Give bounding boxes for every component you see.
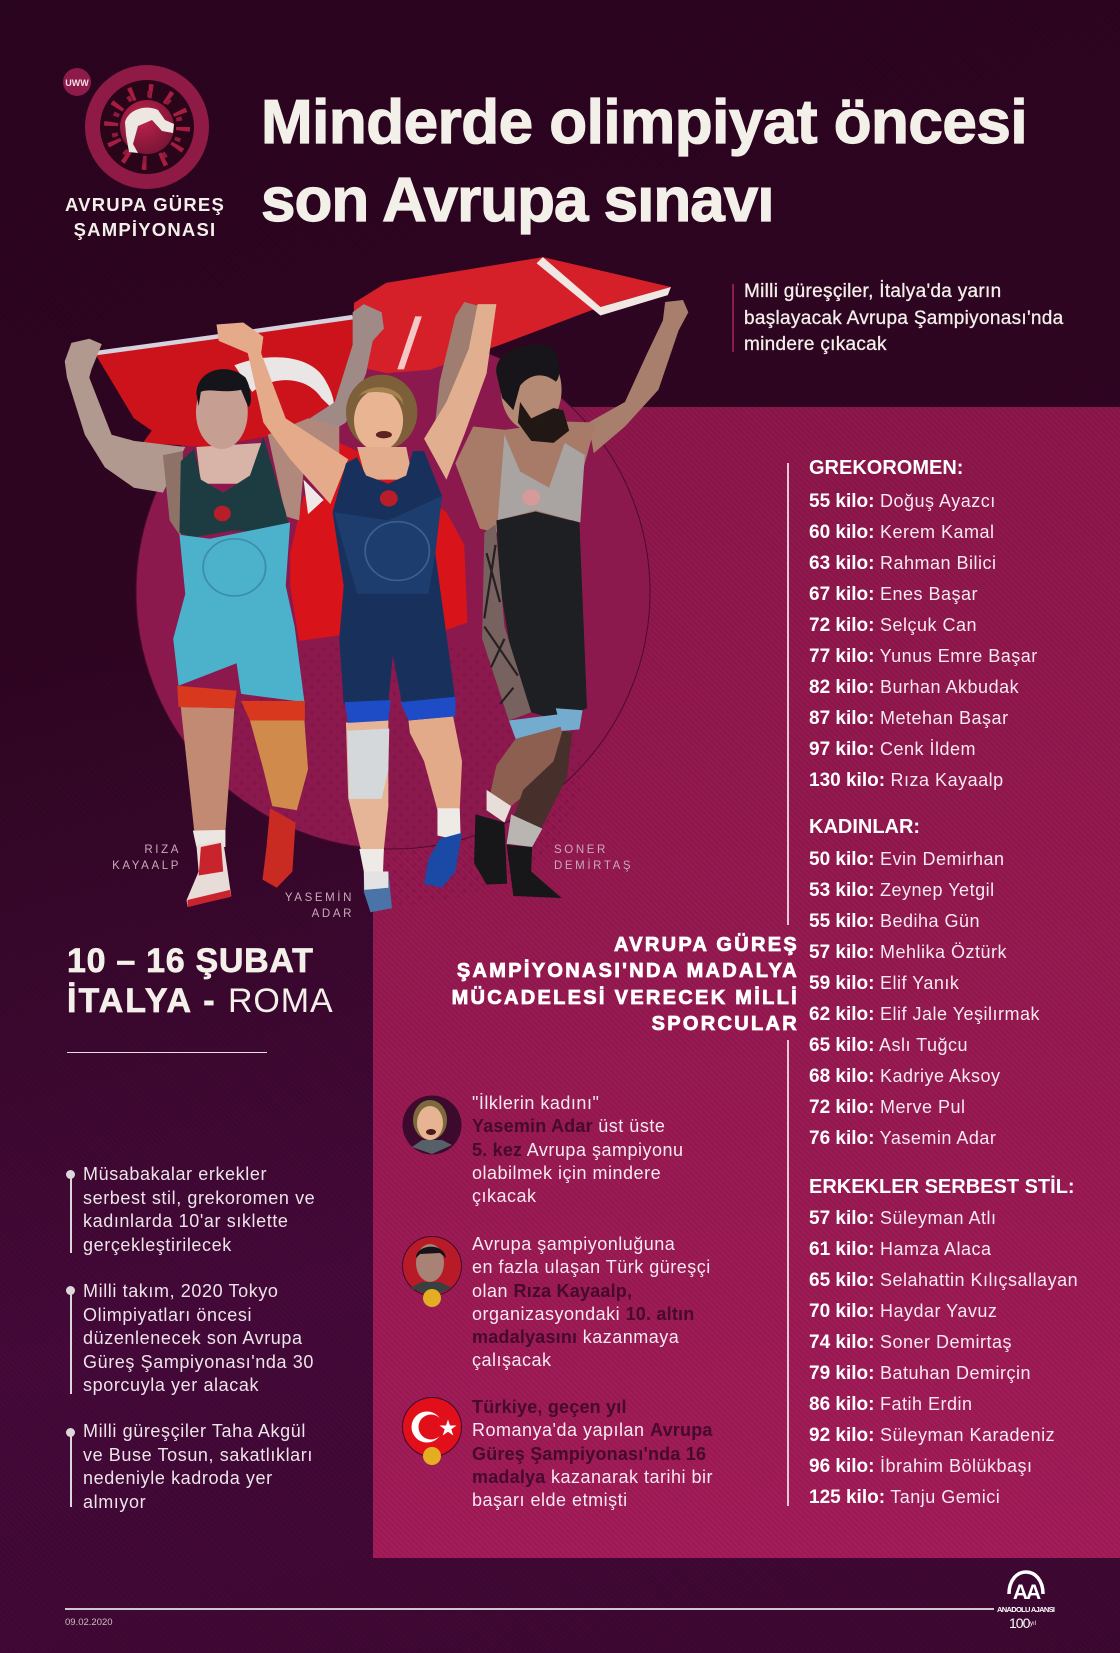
list: Kadınlar: 53 kilo: Zeynep Yetgil xyxy=(809,880,995,901)
list divider xyxy=(787,463,788,925)
label: Yasemin Adar xyxy=(285,890,354,920)
text: Rıza Kayaalp xyxy=(472,1234,711,1370)
list: Grekoromen: 67 kilo: Enes Başar xyxy=(809,584,978,605)
heading: Erkekler Serbest Stil: ERKEKLER SERBEST STİL: xyxy=(809,1176,1075,1198)
list: Grekoromen: 60 kilo: Kerem Kamal xyxy=(809,522,995,543)
caption: Avrupa Güreş Şampiyonası: ŞAMPİYONASI xyxy=(74,219,216,240)
list: Grekoromen: 97 kilo: Cenk İldem xyxy=(809,739,976,760)
label: Yasemin Adar: YASEMİN xyxy=(285,892,354,904)
list: Kadınlar: 68 kilo: Kadriye Aksoy xyxy=(809,1066,1001,1087)
date and location heading: İTALYA - ROMA xyxy=(67,982,334,1020)
list: Erkekler Serbest Stil: 61 kilo: Hamza Alaca xyxy=(809,1239,992,1260)
text: Türkiye 16 medals xyxy=(472,1397,713,1510)
bullet: competition format: gerçekleştirilecek xyxy=(83,1234,232,1254)
bullet: national team: düzenlenecek son Avrupa xyxy=(83,1328,303,1348)
text: Yasemin Adar xyxy=(472,1093,684,1206)
list: Erkekler Serbest Stil: 92 kilo: Süleyman Karadeniz xyxy=(809,1425,1055,1446)
wrestler: Rıza Kayaalp xyxy=(65,304,384,907)
label: Soner Demirtaş: DEMİRTAŞ xyxy=(554,860,633,872)
caption: Avrupa Güreş Şampiyonası xyxy=(65,194,225,240)
wrestler: Yasemin Adar xyxy=(217,304,496,912)
bullet: injured wrestlers: nedeniyle kadroda yer xyxy=(83,1468,273,1488)
list: Kadınlar: 76 kilo: Yasemin Adar xyxy=(809,1128,996,1149)
list: Kadınlar: 57 kilo: Mehlika Öztürk xyxy=(809,942,1007,963)
text: Rıza Kayaalp: organizasyondaki 10. altın xyxy=(472,1304,694,1324)
text: Rıza Kayaalp: olan Rıza Kayaalp, xyxy=(472,1281,632,1301)
heading: athletes competing for medals: SPORCULAR xyxy=(652,1013,799,1035)
text: Rıza Kayaalp: en fazla ulaşan Türk güreşçi xyxy=(472,1257,711,1277)
list: Erkekler Serbest Stil: 70 kilo: Haydar Yavuz xyxy=(809,1301,997,1322)
logo: Anadolu Ajansı: AA xyxy=(1013,1581,1041,1604)
heading: Grekoromen: GREKOROMEN: xyxy=(809,457,963,479)
label: Soner Demirtaş: SONER xyxy=(554,844,608,856)
list: Kadınlar: 59 kilo: Elif Yanık xyxy=(809,973,959,994)
list: Erkekler Serbest Stil xyxy=(809,1208,1078,1508)
list: Grekoromen: 87 kilo: Metehan Başar xyxy=(809,708,1009,729)
list: Erkekler Serbest Stil: 125 kilo: Tanju Gemici xyxy=(809,1487,1000,1508)
title xyxy=(261,88,1027,235)
UWW badge: UWW xyxy=(65,78,89,88)
label: Rıza Kayaalp xyxy=(112,844,181,872)
label: Rıza Kayaalp: KAYAALP xyxy=(112,860,181,872)
intro text with side bar: mindere çıkacak xyxy=(744,334,887,355)
text: Rıza Kayaalp: çalışacak xyxy=(472,1350,552,1370)
text: Türkiye 16 medals: Güreş Şampiyonası'nda 16 xyxy=(472,1444,706,1464)
label: Soner Demirtaş xyxy=(554,844,633,872)
list: Kadınlar: 55 kilo: Bediha Gün xyxy=(809,911,980,932)
text: Türkiye 16 medals: Türkiye, geçen yıl xyxy=(472,1397,627,1417)
text: Türkiye 16 medals: Romanya'da yapılan Avrupa xyxy=(472,1420,713,1440)
heading: Kadınlar: KADINLAR: xyxy=(809,816,920,838)
text: Yasemin Adar: Yasemin Adar üst üste xyxy=(472,1116,665,1136)
list: Kadınlar xyxy=(809,849,1040,1149)
list: Erkekler Serbest Stil: 79 kilo: Batuhan Demirçin xyxy=(809,1363,1031,1384)
title: son Avrupa sınavı xyxy=(261,166,773,234)
list: Erkekler Serbest Stil: 96 kilo: İbrahim Bölükbaşı xyxy=(809,1456,1033,1477)
heading: athletes competing for medals: MÜCADELESİ VERECEK MİLLİ xyxy=(452,987,799,1009)
emblem ring xyxy=(85,65,209,189)
list divider lower xyxy=(787,1040,788,1506)
bullet: national team: Güreş Şampiyonası'nda 30 xyxy=(83,1352,314,1372)
label: Yasemin Adar: ADAR xyxy=(312,908,354,920)
icon: Rıza Kayaalp portrait with medal xyxy=(402,1236,462,1307)
list: Kadınlar: 65 kilo: Aslı Tuğcu xyxy=(809,1035,968,1056)
intro text with side bar xyxy=(732,280,1064,355)
flag xyxy=(96,257,671,641)
list: Grekoromen xyxy=(809,491,1038,791)
divider under date xyxy=(67,1052,267,1053)
logo: UWW European Wrestling Championship emblem xyxy=(63,65,209,189)
text: Yasemin Adar: 5. kez Avrupa şampiyonu xyxy=(472,1140,684,1160)
caption: Avrupa Güreş Şampiyonası: AVRUPA GÜREŞ xyxy=(65,194,225,215)
list: Kadınlar: 72 kilo: Merve Pul xyxy=(809,1097,966,1118)
bullet: injured wrestlers: almıyor xyxy=(83,1492,146,1512)
text: Yasemin Adar: çıkacak xyxy=(472,1186,537,1206)
bullet: injured wrestlers: ve Buse Tosun, sakatlıkları xyxy=(83,1444,313,1464)
heading: athletes competing for medals: ŞAMPİYONASI'NDA MADALYA xyxy=(457,960,799,982)
list: Erkekler Serbest Stil: 86 kilo: Fatih Erdin xyxy=(809,1394,973,1415)
list: Grekoromen: 55 kilo: Doğuş Ayazcı xyxy=(809,491,996,512)
bullet: national team xyxy=(66,1281,314,1395)
logo: Anadolu Ajansı: 100 xyxy=(1009,1615,1031,1631)
bullet: injured wrestlers xyxy=(66,1421,313,1512)
list: Grekoromen: 63 kilo: Rahman Bilici xyxy=(809,553,997,574)
list: Grekoromen: 77 kilo: Yunus Emre Başar xyxy=(809,646,1038,667)
text: Yasemin Adar: olabilmek için mindere xyxy=(472,1163,661,1183)
list: Kadınlar: 50 kilo: Evin Demirhan xyxy=(809,849,1005,870)
bullet: injured wrestlers: Milli güreşçiler Taha Akgül xyxy=(83,1421,306,1441)
wrestler: Soner Demirtaş xyxy=(435,300,688,898)
text: Yasemin Adar: "İlklerin kadını" xyxy=(472,1093,599,1113)
icon: Yasemin Adar portrait xyxy=(402,1096,462,1154)
logo: Anadolu Ajansı: yıl xyxy=(1030,1621,1036,1627)
label: Rıza Kayaalp: RIZA xyxy=(144,844,181,856)
footer line xyxy=(65,1608,994,1610)
icon: Turkish flag with medal xyxy=(402,1397,462,1465)
text: Rıza Kayaalp: Avrupa şampiyonluğuna xyxy=(472,1234,675,1254)
UWW badge xyxy=(63,68,91,96)
list: Erkekler Serbest Stil: 57 kilo: Süleyman Atlı xyxy=(809,1208,997,1229)
bullet: national team: Olimpiyatları öncesi xyxy=(83,1304,252,1324)
bullet: competition format: Müsabakalar erkekler xyxy=(83,1164,267,1184)
bullet: competition format: kadınlarda 10'ar sıklette xyxy=(83,1211,289,1231)
text: Türkiye 16 medals: başarı elde etmişti xyxy=(472,1490,628,1510)
list: Erkekler Serbest Stil: 74 kilo: Soner Demirtaş xyxy=(809,1332,1012,1353)
list: Grekoromen: 82 kilo: Burhan Akbudak xyxy=(809,677,1019,698)
heading: athletes competing for medals xyxy=(452,932,799,1035)
list: Grekoromen: 72 kilo: Selçuk Can xyxy=(809,615,977,636)
date and location heading xyxy=(67,942,334,1020)
logo: Anadolu Ajansı xyxy=(997,1570,1055,1631)
date and location heading: 10 – 16 ŞUBAT xyxy=(67,942,314,980)
bullet: competition format xyxy=(66,1164,315,1255)
intro text with side bar: Milli güreşçiler, İtalya'da yarın xyxy=(744,281,1001,302)
list: Grekoromen: 130 kilo: Rıza Kayaalp xyxy=(809,770,1004,791)
bullet: national team: sporcuyla yer alacak xyxy=(83,1375,259,1395)
date: 09.02.2020 xyxy=(65,1617,113,1628)
circle behind wrestlers xyxy=(136,335,650,905)
heading: athletes competing for medals: AVRUPA GÜREŞ xyxy=(614,934,799,956)
list: Erkekler Serbest Stil: 65 kilo: Selahattin Kılıçsallayan xyxy=(809,1270,1078,1291)
title: Minderde olimpiyat öncesi xyxy=(261,88,1027,156)
intro text with side bar: başlayacak Avrupa Şampiyonası'nda xyxy=(744,308,1064,328)
logo: Anadolu Ajansı: ANADOLU AJANSI xyxy=(997,1605,1055,1614)
bullet: national team: Milli takım, 2020 Tokyo xyxy=(83,1281,279,1301)
text: Rıza Kayaalp: madalyasını kazanmaya xyxy=(472,1327,679,1347)
bullet: competition format: serbest stil, grekoromen ve xyxy=(83,1188,315,1208)
text: Türkiye 16 medals: madalya kazanarak tarihi bir xyxy=(472,1467,713,1487)
list: Kadınlar: 62 kilo: Elif Jale Yeşilırmak xyxy=(809,1004,1040,1025)
